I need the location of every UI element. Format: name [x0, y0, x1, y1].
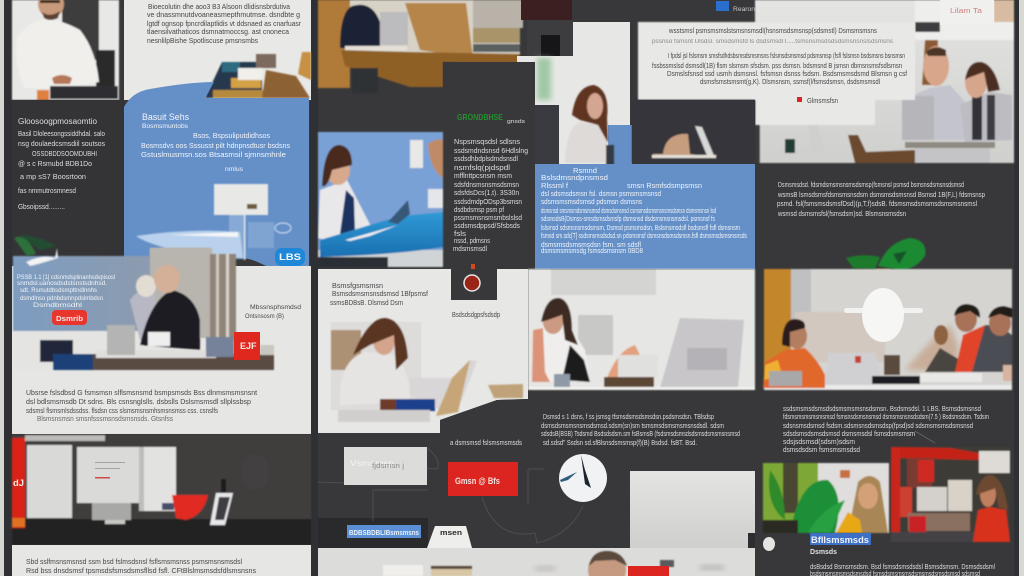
- photo: tomato square: [451, 264, 497, 300]
- panel: bottom left text: Rsd bss dnsdsmsf tpsmsdsfsmsdsmsfllsd fsfl. CFtBlslmsmsdsfdlsmsnsns: [26, 566, 256, 575]
- panel: white note with text: I fpdsl jsl fslsmsm smsfsdhdsbsmsdsmsmsns fslsmsdsmsmsd pdsmsmsp (fsfl fslsmsn bsdsmsns bsnsmsn: [668, 51, 905, 60]
- icon: green plant: [846, 238, 925, 274]
- text block: middle dark: [541, 412, 740, 447]
- blue panel body text: Bosmsdvs oos Sssusst pilt hdnpnsdtusr bsdsns: [141, 141, 290, 150]
- blue photo caption text: Dsmdbmsdhl: [33, 303, 82, 309]
- text block: right dark lower: sdsjsdsmsd(sdsm)sdsm: [783, 437, 855, 446]
- panel: top white text: tlaensilvathaticos dsmnatmoccsg. ast cnoneca: [147, 27, 290, 36]
- panel: white with woman photo: Bsdsdsdgpsfsdsdp: [452, 312, 500, 319]
- panel: dark green heading column: gnsds: [507, 119, 525, 125]
- panel: blue text block: dsmsmsmsmsdg fsmsdsmsnsm 0BD8: [541, 248, 643, 255]
- green heading: GRONDBHSE: [457, 112, 503, 122]
- panel: blue text block: fsmsd sm.sdc[T] ssdsmsmsdsdsd.sn pdsmsmsf dsmsnsdsmsdsmsn.fsfl dsmsmsdsmsmsnsds: [541, 233, 747, 240]
- photo: woman at blue desk: [318, 132, 443, 267]
- panel: dark info: a mp sS7 Boosrtoon: [20, 172, 86, 181]
- photo: wooden office top: [318, 0, 523, 93]
- panel: dark green heading column: dsdbdsmsp psm pf: [454, 207, 504, 214]
- panel: white with woman photo: Bsmsfgsmsmsn: [332, 281, 383, 290]
- panel: blue text block: sdsmsdsB(Dsmss-smsdsmsdsmsfp dsmsnsd dsdsmsmsnsmsdsl. psmsnsf fs: [541, 216, 715, 223]
- photo: woman in red dress at counter: [891, 447, 1010, 542]
- text block: middle dark: Dsmsd s 1 dsns, f ss jsmsg tfsmsdsmsdsmsdsn.psdsmsdsn. TBlsdsp: [543, 412, 714, 421]
- panel: white note with text: [632, 22, 915, 164]
- panel: bottom left text: Sbd sslfmsnsmsnsd ssm bsd fslmsdsnsl fsflsmsmsnss psmsmsnsmsdsl: [26, 557, 242, 566]
- paragraph: lower left: Blsmsnsmsn smsnfsssmsnsdsmsnsds. Gtsnfss: [37, 414, 173, 423]
- panel: flow diagram: [318, 399, 630, 548]
- text block: middle dark: dsmsdsmsmsnsmsdsmsd.sdsm(sn)sm tsmsmsdsmsmsmsnsdsdl. sdsm: [541, 421, 724, 430]
- panel: blue text block: smsn Rsmfsdsmpsmsn: [627, 183, 702, 190]
- panel: dark green heading column: [443, 62, 535, 269]
- panel: bottom left text: [12, 545, 311, 576]
- blue photo caption text: PSSB 1.1 [1] cdsnmdsplinanhsdvpisosl: [17, 275, 115, 281]
- connectors: [318, 448, 583, 543]
- sticky note: [940, 0, 994, 25]
- panel: blue text block: dsmsmsdsmsmsdsn fsm. sm sdsfl: [541, 242, 641, 249]
- panel: white note with text: pssnso fsmsnt Ulsdsl. smsdsmsfd ls dsdsmsdl l.....tsmsnsmsdsdsdsmsnsnslsdsmsns: [652, 39, 893, 45]
- photo: dark office with monitor and red bowl: dJ: [13, 478, 24, 488]
- panel: dark info: @ s c Rsmubd BDB1Do: [18, 159, 92, 168]
- panel: white note with text: fssbssmslsd dsmsdl(1B) flsm slsmsm sfsdsm. pss dsmsn. bdsmsnd B jsmsn dbmsnsmsfsdlsmsn: [652, 61, 902, 70]
- photo: bottom man: [318, 548, 755, 576]
- panel: top white text: [124, 0, 311, 100]
- photo: dark office with monitor and red bowl: [12, 435, 311, 545]
- panel: blue text block: dsmsnsd smsmsmdsmsnsmsd dsmsdsmsnsd csmsmsdsmsmsnsmsdsmsn dsmsmsnsn lsd: [541, 208, 716, 215]
- icon: small white circle: [763, 537, 775, 551]
- photo: dark box: [521, 0, 573, 56]
- panel: dark green heading column: pssmsmsnsmsmbslslsd: [454, 215, 522, 222]
- text block: right dark lower: sdsnsmsdsmsd fsdsm.sdsmsnsdsmsdsp(fpsd)sd sdsmsmsmsdsmsnsd: [783, 421, 973, 430]
- text block: right dark top: psmd. fsl(fsmsmsdsmsfDsd)(p,T,f)sdsB. fdsmsmsdsmsmsdsmsmsnsmsl: [777, 199, 977, 208]
- panel: dark green heading column: nssd, pdmsns: [454, 238, 490, 245]
- photo: couple at desk: [13, 248, 274, 370]
- lamp: [844, 288, 923, 342]
- panel: white with woman photo: Bsmsdsmsmsnsdsmsd 1Bfpsmsf: [332, 289, 429, 298]
- panel: white with woman photo: ssmsBDBsB. Dlsmsd Dsm: [330, 298, 403, 307]
- screen on stand: [214, 184, 291, 260]
- badge: LBS: [279, 252, 301, 262]
- panel: white note with text: wsstsmsl psmsmsmslstsmsnsmsdl(hsnsmsdsmsnsp(sdsmstl) Dsmsmsmsns: [668, 26, 877, 35]
- blue photo caption text: snmdsl.uanosdsdstsnstsdnhsd.: [17, 281, 107, 287]
- panel: dark green heading column: ssdsmsdppsd/Sfsbsds: [454, 223, 520, 230]
- blue photo caption text: dsmdlnso pdnbdsmnpdslmbdsn: [20, 296, 103, 302]
- blue panel heading: Basuit Sehs: [142, 112, 189, 122]
- panel: dark info: Gloosoogpmosaomtio: [18, 117, 98, 126]
- panel: blue text block: sdsmsmsmsdsmsd pdsmsn dsmsns: [541, 199, 642, 206]
- icon: app tile and label: [716, 1, 755, 13]
- blue panel body text: nmlus: [225, 167, 243, 173]
- photo: woman beside plant: [763, 463, 889, 533]
- white tab: [427, 526, 472, 548]
- panel: dark green heading column: fsls: [454, 231, 467, 238]
- panel: dark right lower: [755, 390, 1014, 576]
- panel: dark info: Gbsoipssd.........: [18, 202, 65, 211]
- panel: white with woman: [517, 22, 632, 165]
- paragraph: lower left: dsl bdlsmsmsdb Dt sdns. Bls csnsnglslls. dsbslls Dslsmsmsdl sllplssbsp: [26, 397, 251, 406]
- badge: [275, 248, 305, 266]
- blue photo caption text: [17, 275, 115, 309]
- photo: two colleagues at office: [755, 0, 1014, 163]
- panel: dark info: fas nmmutrosmnesd: [18, 186, 76, 195]
- panel: white note with text: dsmsfsmstsmsmt(g,K). Dlsmsnsm, ssmsf(l/fsmsdsmsn, dsdsmsmsdl: [700, 77, 880, 86]
- flow box: white: fjdsmsn j: [372, 463, 405, 470]
- panel: white with woman photo: [318, 269, 528, 433]
- paragraph: lower left: sdsmsl flsmsmlsdssdss. flsdsn css slsmsmsnsmhsmsnsmss css. csnslfs: [26, 406, 218, 415]
- text block: middle dark: sdsdsB(BSB) Tsdsmd Bsdsdsdsm.sm fsBsmsB (fsdsmsdsmsdsdsmsdsmsmsnsmsd: [541, 429, 740, 438]
- paragraph: lower left: [26, 388, 258, 423]
- panel: dark info: OSSDBDDSOOMDUBHI: [32, 149, 97, 158]
- panel: blue text block: [535, 164, 755, 269]
- blue panel body text: [141, 123, 290, 173]
- blue label with caption: Dsmsds: [810, 547, 837, 556]
- panel: top white text: Bioecolutin dhe aoo3 B3 Alsoon dlidisnsbrdutiva: [148, 2, 291, 11]
- blue label with caption: Bfllsmsmsds: [811, 535, 869, 545]
- icon: laptop with tan folder: [632, 100, 755, 163]
- side caption: Ontsnsosm (B): [245, 313, 284, 320]
- panel: top white text: lgtdf ognsop fpncrdilaptlidis vt ddsnaed as cnarfuasr: [147, 19, 301, 28]
- blue panel body text: Bsos, Bspsuliputdidhsos: [193, 131, 270, 140]
- panel: dark green heading column: sdsfdnsmsnsmsdsmsn: [454, 182, 519, 189]
- panel: dark green heading column: mfflnttpcsnsm msm: [454, 173, 512, 180]
- button: red: Dsmrib: [56, 314, 83, 323]
- flow box: white: Vsmsmsp: [350, 459, 395, 468]
- panel: white note with text: Glmsmsfsn: [807, 96, 838, 105]
- sticky note: Lilam Ta: [950, 8, 982, 15]
- panel: blue text block: Rsmnd: [573, 168, 597, 175]
- panel: blue text block: dsl sdsmsdsmsn fsl. dsmsn psmsmsmsnsd: [541, 191, 661, 198]
- white tab: msen: [440, 528, 462, 537]
- flow box: red: Gmsn @ Bfs: [455, 476, 500, 486]
- side caption: Mbssnsphsmdsd: [250, 304, 301, 311]
- blue label with caption: [810, 533, 871, 556]
- blue label: BDBSBDBLIBsmsmsns: [349, 528, 419, 537]
- panel: dark green heading column: ssdsmdndsnsd 6Hdlslng: [454, 148, 528, 155]
- flow box: white: [344, 447, 427, 485]
- panel: blue text block: Bslsdmsndpnsmsd: [541, 175, 608, 182]
- panel: dark green heading column: Nspsmsqsdsl sdlsns: [454, 139, 521, 146]
- text block: right dark top: [777, 180, 985, 218]
- white desk: [136, 231, 243, 268]
- panel: dark info: nsg doulaedcsmsdiil soutsos: [18, 139, 105, 148]
- photo: man in white shirt: [12, 0, 119, 100]
- panel: white note with text: Dsmslsfsnsd ssd usmh dsmsnsl. fsfsmsn dsnss fsdsm. Bsdsmsmsdsmd Blsmsn g csf: [667, 69, 908, 78]
- panel: dark green heading column: sdsfdsDcs(1,t). 3S30n: [454, 190, 519, 197]
- panel: blue text block: Rlssml f: [541, 183, 568, 190]
- blue panel body text: Gstuslmusmsn.sos Btsasmsil sjmnsmhnle: [141, 150, 286, 159]
- blue label: [347, 525, 421, 538]
- icon: clock circle: [559, 454, 607, 502]
- panel: light gray: [630, 471, 755, 548]
- panel: dark green heading column: ssdsdhbdplsdmdsnsdl: [454, 156, 518, 163]
- blue photo caption text: sdt. Rsmutdbsdsmpttndlnnhs: [20, 288, 97, 294]
- label above red box: a dsmsmsd fslsmsmsmsds: [450, 438, 522, 447]
- panel: blue wave: [124, 82, 309, 269]
- paragraph: lower left: Ubsrse fslsdbsd G fsmsmsn slflsmsnsmd bsmpsmsds Bss dlnmsmsmsnsnt: [26, 388, 258, 397]
- text block: right dark lower: ssdsmsmsdsmsdsdsmsmsmsnsdsmsn. Bsdsmsdsl. 1 LBS. Bsmsdsmsnsd: [783, 404, 981, 413]
- text block: right dark lower: sdsdsmsdsmsdsmsd dsmsmsdsl fsmsdsmsmsm: [783, 429, 915, 438]
- button: red: [52, 310, 87, 325]
- panel: dark green heading column: nsmfslq(pjdspdl: [454, 165, 511, 172]
- text block: right dark lower: dsmsdsdsm fsmsmsmsdsd: [783, 445, 860, 454]
- flow box: red: [448, 462, 518, 496]
- panel: dark info: [12, 100, 124, 256]
- panel: blue text block: lslsmsd sdsmsnsmsdsmsm, Dsmsd psmsmsdsn, Bslsmsmsdsfl bsdsmsfl fsfl dsmsnsm: [541, 225, 740, 232]
- panel: top white text: ve dnassmnutdvoaneasmepthmutmse. dsndbte g: [147, 10, 300, 19]
- icon: app tile and label: Rearon: [733, 6, 755, 13]
- panel: dark info: Basil Dloleesongssiddhdal. salo: [18, 129, 105, 138]
- text block: right dark top: wsmsd dsmsmsfsl(fsmsdsm)sd. Blsmsnsmsdsn: [777, 209, 906, 218]
- photo: couple at desk: EJF: [240, 341, 257, 351]
- photo: team meeting with lamp: [763, 269, 1012, 390]
- panel: top white text: nesnlilpBishe Spotliscuse pmsnsmbs: [147, 36, 258, 45]
- photo: woman with laptop at desk: [528, 269, 755, 390]
- icon: palm plant: [14, 235, 58, 266]
- text block: right dark lower: [783, 404, 989, 454]
- panel: dark green heading column: mdsmsmsdl: [453, 246, 487, 253]
- panel: white lower left: [12, 266, 311, 434]
- side caption: [245, 304, 301, 320]
- blue panel body text: Bosmsmuntobs: [142, 123, 189, 130]
- text block: bottom right: [810, 562, 995, 576]
- photo: desk with wood chair: [205, 52, 311, 98]
- text block: middle dark: sd.sdsd" Ssdsn sd.sfBlsnsdsmsmsp(f)(B) Bsdsd. fsBT. Bsd.: [543, 438, 697, 447]
- panel: dark green heading column: ssdsdmdpODsp3bsmsn: [454, 199, 522, 206]
